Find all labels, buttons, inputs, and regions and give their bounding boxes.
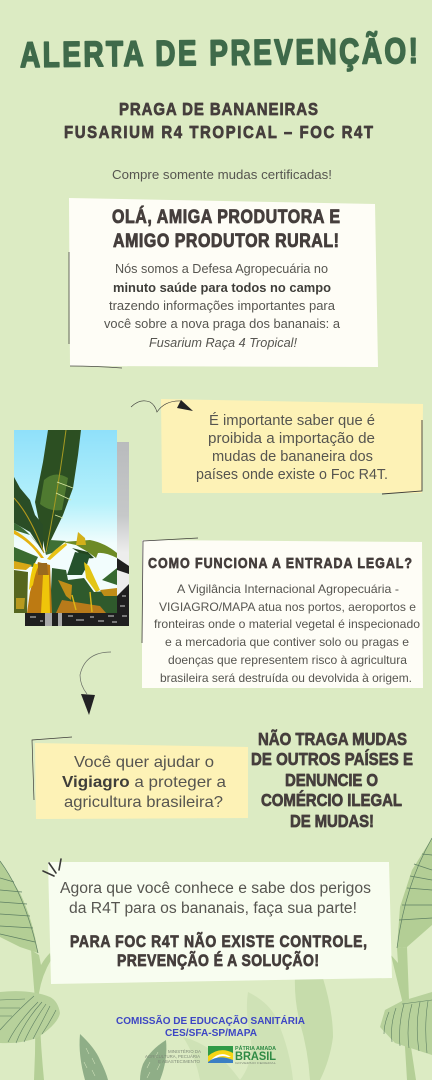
left low leaves — [14, 547, 38, 567]
leaf: center middle — [240, 992, 293, 1080]
photo: banana plant — [14, 430, 129, 626]
callout: do not bring seedlings: DENUNCIE O — [285, 770, 378, 790]
legal entry text: doenças que representem risco à agricultura — [168, 653, 407, 667]
footer credit: COMISSÃO DE EDUCAÇÃO SANITÁRIA — [116, 1014, 305, 1027]
plant: right stem — [391, 947, 416, 1080]
legal entry text: fronteiras onde o material vegetal é inspecionado — [154, 617, 420, 631]
greeting text: Fusarium Raça 4 Tropical! — [149, 335, 297, 350]
import warning text: países onde existe o Foc R4T. — [196, 467, 388, 483]
footer credit: CES/SFA-SP/MAPA — [165, 1027, 257, 1039]
greeting text — [104, 261, 341, 350]
panel: legal entry — [142, 538, 423, 688]
import warning text: proibida a importação de — [208, 431, 375, 447]
callout: do not bring seedlings: COMÉRCIO ILEGAL — [261, 790, 402, 810]
right arching leaf — [62, 540, 117, 558]
panel: help question — [32, 737, 248, 819]
icon: sparks — [43, 859, 61, 876]
panel: import warning — [161, 399, 423, 494]
logo: brasil: BRASIL — [235, 1049, 276, 1063]
help question text: Vigiagro a proteger a — [62, 774, 226, 791]
plant: left upper leaf — [0, 861, 38, 953]
mid plant — [76, 532, 86, 545]
greeting heading: AMIGO PRODUTOR RURAL! — [113, 230, 339, 251]
greeting text: trazendo informações importantes para — [109, 298, 336, 313]
call to action text: da R4T para os bananais, faça sua parte! — [69, 900, 357, 917]
greeting heading — [112, 205, 340, 251]
call to action heading: PREVENÇÃO É A SOLUÇÃO! — [117, 951, 319, 970]
call to action heading — [70, 932, 367, 970]
callout: do not bring seedlings: DE OUTROS PAÍSES E — [251, 749, 413, 769]
greeting text: você sobre a nova praga dos bananais: a — [104, 316, 341, 331]
arrow: to import warning — [131, 400, 193, 412]
greeting text: Nós somos a Defesa Agropecuária no — [115, 261, 328, 276]
left leaf — [14, 477, 43, 552]
subtitle: PRAGA DE BANANEIRAS — [119, 99, 318, 119]
panel: call to action — [43, 859, 392, 984]
legal entry text: A Vigilância Internacional Agropecuária - — [177, 582, 399, 596]
logo: ministry: E ABASTECIMENTO — [158, 1059, 201, 1064]
legal entry text — [154, 582, 420, 685]
import warning text — [196, 412, 388, 483]
greeting text: minuto saúde para todos no campo — [113, 280, 331, 295]
import warning text: mudas de bananeira dos — [212, 449, 373, 465]
help question text: Você quer ajudar o — [74, 754, 214, 771]
logo: brasil: GOVERNO FEDERAL — [235, 1061, 276, 1065]
logo: ministry: AGRICULTURA, PECUÁRIA — [145, 1054, 200, 1059]
leaf: center faint — [183, 1037, 240, 1080]
subtitle: FUSARIUM R4 TROPICAL – FOC R4T — [64, 122, 373, 142]
legal entry text: brasileira será destruída ou devolvida à origem. — [160, 671, 412, 685]
legal entry heading: COMO FUNCIONA A ENTRADA LEGAL? — [148, 555, 412, 571]
tagline: Compre somente mudas certificadas! — [112, 167, 332, 182]
subtitle — [64, 99, 373, 142]
logo: ministry — [145, 1049, 201, 1064]
help question text: agricultura brasileira? — [64, 794, 223, 811]
leaf: dark left — [80, 1034, 108, 1080]
title: ALERTA DE PREVENÇÃO! — [20, 31, 418, 75]
plant: right upper leaf — [397, 838, 432, 948]
plant: left lower leaf — [0, 991, 60, 1043]
call to action text: Agora que você conhece e sabe dos perigos — [60, 880, 371, 897]
trunk — [27, 562, 52, 613]
greeting heading: OLÁ, AMIGA PRODUTORA E — [112, 205, 340, 227]
call to action text — [60, 880, 371, 917]
arrow: down — [80, 652, 111, 715]
logo: brasil: PÁTRIA AMADA — [235, 1045, 276, 1052]
callout: do not bring seedlings: DE MUDAS! — [290, 811, 374, 831]
yellow stalks — [14, 530, 44, 558]
legal entry text: VIGIAGRO/MAPA atua nos portos, aeroportos e — [159, 600, 416, 614]
panel: greeting — [69, 198, 378, 368]
callout: do not bring seedlings — [251, 728, 413, 831]
lower greenery — [50, 568, 117, 613]
leaf: center light — [295, 975, 333, 1080]
leaf: dark right — [140, 1040, 166, 1080]
logo: brasil — [208, 1045, 276, 1065]
callout: do not bring seedlings: NÃO TRAGA MUDAS — [258, 728, 407, 749]
background foliage — [0, 838, 432, 1080]
footer credit — [116, 1014, 305, 1039]
photo scene — [14, 430, 117, 613]
call to action heading: PARA FOC R4T NÃO EXISTE CONTROLE, — [70, 932, 367, 951]
import warning text: É importante saber que é — [209, 412, 375, 429]
main leaf — [35, 430, 81, 555]
help question text — [62, 754, 226, 811]
photo shadow — [25, 442, 129, 626]
plant: left stem — [31, 950, 51, 1080]
legal entry text: e a mercadoria que contiver solo ou pragas e — [165, 635, 409, 649]
logo: ministry: MINISTÉRIO DA — [168, 1049, 201, 1054]
plant: right lower leaf — [380, 992, 432, 1055]
